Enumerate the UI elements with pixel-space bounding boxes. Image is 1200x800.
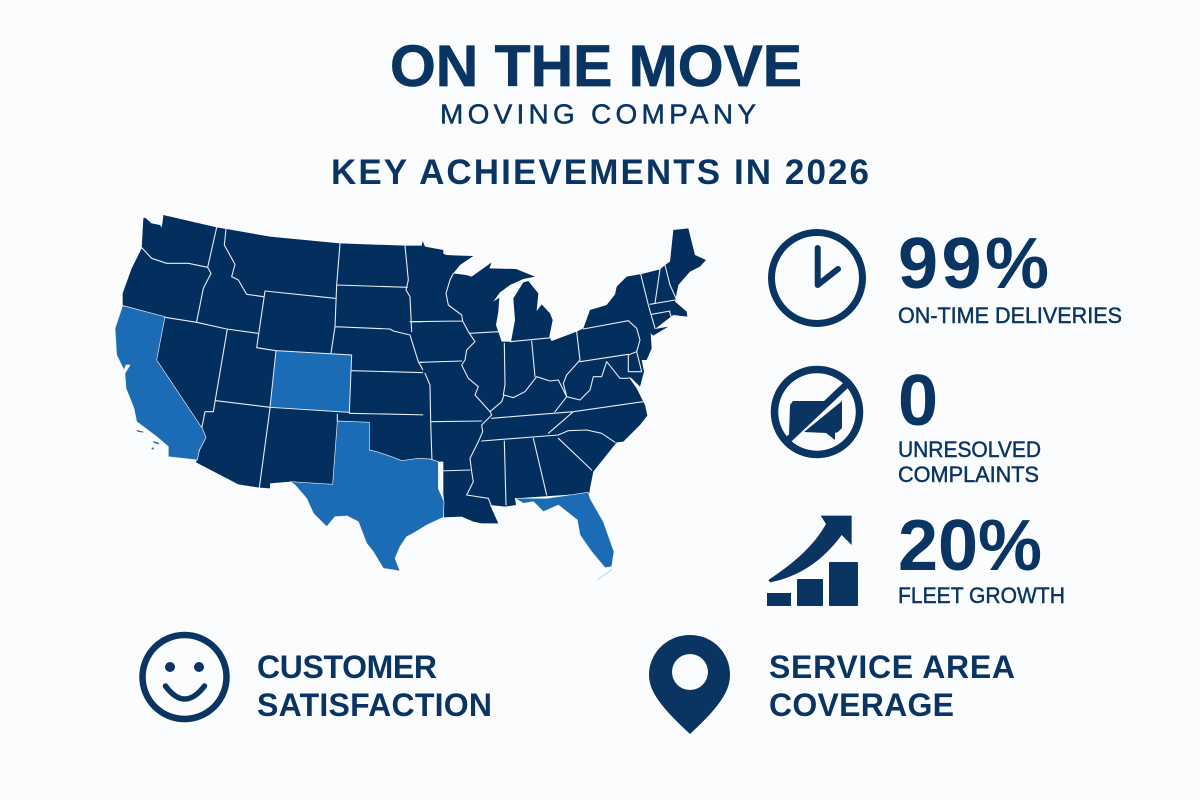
- Florida keys: [597, 570, 612, 580]
- label: customer satisfaction: SATISFACTION: [257, 687, 492, 723]
- stat: unresolved complaints: UNRESOLVED: [898, 437, 1041, 462]
- stat: fleet growth: FLEET GROWTH: [898, 583, 1065, 608]
- highlighted state: Colorado: [270, 351, 352, 412]
- highlighted state: Florida: [515, 492, 614, 568]
- icon: location pin: [649, 635, 730, 734]
- heading: key achievements: KEY ACHIEVEMENTS IN 2026: [331, 153, 869, 192]
- stat: unresolved complaints: 0: [898, 361, 938, 441]
- western states: [123, 215, 443, 488]
- subtitle: MOVING COMPANY: [440, 98, 756, 130]
- label: service area coverage: COVERAGE: [769, 687, 954, 723]
- title: ON THE MOVE: [390, 34, 802, 99]
- label: customer satisfaction: [257, 649, 492, 723]
- icon: no complaints: [774, 370, 860, 454]
- icon: growth chart: [767, 516, 858, 606]
- stat: unresolved complaints: COMPLAINTS: [898, 462, 1039, 487]
- stat: on-time deliveries: [898, 224, 1122, 328]
- icon: smiley: [142, 635, 226, 719]
- California islands: [137, 430, 159, 449]
- stat: fleet growth: [898, 506, 1065, 608]
- eastern states: [410, 228, 706, 523]
- stat: unresolved complaints: [898, 361, 1041, 487]
- stat: on-time deliveries: 99%: [898, 224, 1049, 304]
- label: service area coverage: [769, 649, 1015, 723]
- highlighted state: Texas: [291, 421, 444, 571]
- icon: clock: [772, 232, 862, 324]
- stat: fleet growth: 20%: [898, 506, 1042, 586]
- label: service area coverage: SERVICE AREA: [769, 649, 1015, 685]
- map: United States: [115, 215, 706, 580]
- stat: on-time deliveries: ON-TIME DELIVERIES: [898, 303, 1122, 328]
- highlighted state: California: [115, 306, 206, 460]
- label: customer satisfaction: CUSTOMER: [257, 649, 437, 685]
